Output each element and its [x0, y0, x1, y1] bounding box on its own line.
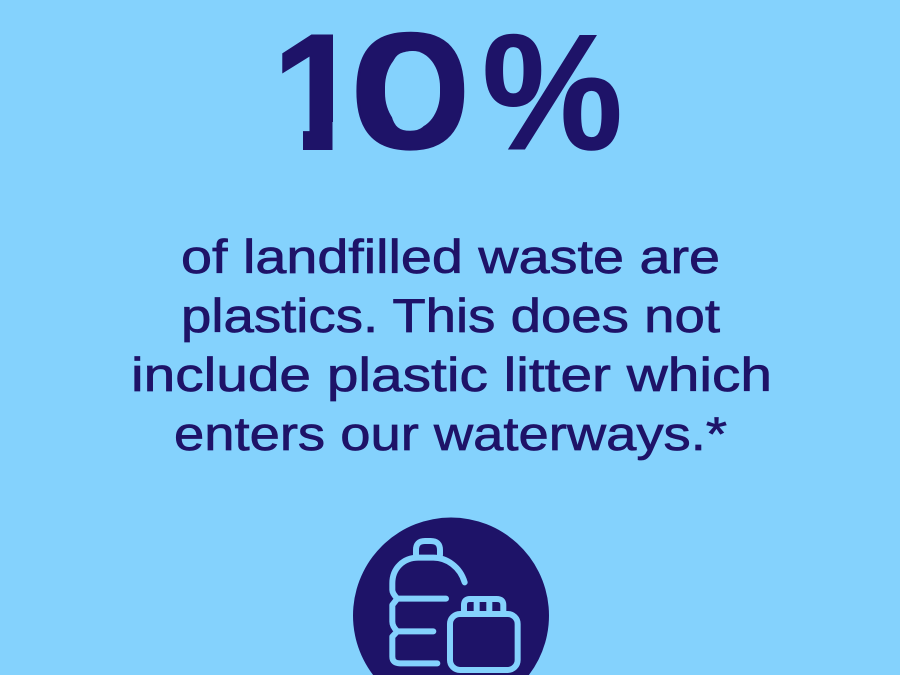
body text: enters our waterways.*: [174, 407, 727, 460]
body text: include plastic litter which: [131, 348, 772, 401]
icon: plastic bottle and jar in circle: [353, 518, 549, 675]
headline: 10%: [282, 32, 620, 151]
headline: 10%: %: [482, 1, 623, 185]
headline: 10%: 1: [272, 0, 364, 184]
headline: 10%: 0: [349, 0, 472, 184]
body text: plastics. This does not: [181, 289, 720, 342]
body text: of landfilled waste are: [181, 230, 720, 283]
body text: [131, 230, 772, 460]
